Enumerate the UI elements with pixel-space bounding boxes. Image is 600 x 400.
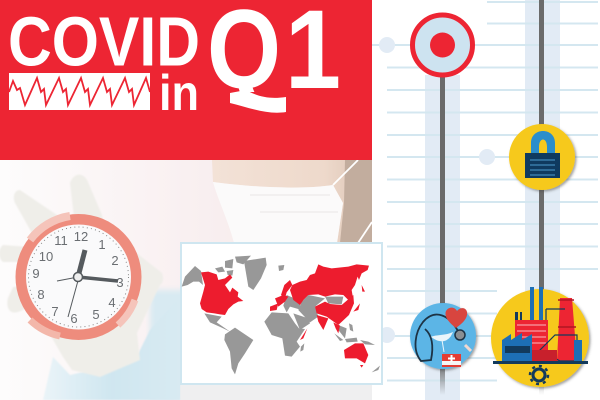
heart <box>445 308 467 328</box>
clock numerals: 6 <box>70 311 78 326</box>
clock numerals: 2 <box>111 253 119 268</box>
image: gloved hand <box>0 175 163 377</box>
clock hands <box>57 250 118 317</box>
clock numerals: 7 <box>51 304 59 319</box>
title: COVID: COVID <box>8 2 200 80</box>
red tower <box>557 298 577 361</box>
map: highlighted countries <box>200 264 369 368</box>
image: face with surgical mask <box>212 160 372 243</box>
panel: timeline background <box>372 0 600 400</box>
clock numerals: 12 <box>74 229 88 244</box>
panel: photo background <box>0 160 372 400</box>
pipes and blue block <box>540 309 577 361</box>
map: grey countries <box>182 256 380 374</box>
blue saw-tooth building <box>502 333 532 361</box>
Q tail <box>230 90 286 113</box>
panel: world map <box>181 243 382 384</box>
icon: padlock <box>509 124 575 190</box>
clock numerals: 4 <box>108 295 116 310</box>
red factory building <box>515 320 548 356</box>
clock numerals: 9 <box>32 266 40 281</box>
title: in: in <box>159 65 199 121</box>
clock numerals: 10 <box>39 249 53 264</box>
clock numerals: 11 <box>54 233 68 248</box>
clock numerals: 8 <box>37 287 45 302</box>
icon: factory <box>491 287 589 387</box>
heartbeat strip <box>9 73 150 110</box>
medical kit <box>442 354 461 367</box>
header banner <box>0 0 372 160</box>
clock numerals: 1 <box>98 237 106 252</box>
icon: medical <box>410 303 476 369</box>
icon: target <box>412 15 472 75</box>
stethoscope <box>415 315 459 361</box>
clock numerals: 5 <box>92 307 100 322</box>
gear <box>533 369 545 381</box>
image: sleeve <box>43 296 180 400</box>
clock numerals: 3 <box>116 275 124 290</box>
factory chimneys <box>530 287 543 320</box>
pills <box>465 345 471 351</box>
icon: wall clock <box>16 214 142 340</box>
white leaves <box>432 333 452 352</box>
clock numerals <box>32 229 124 326</box>
ground line <box>493 361 588 364</box>
